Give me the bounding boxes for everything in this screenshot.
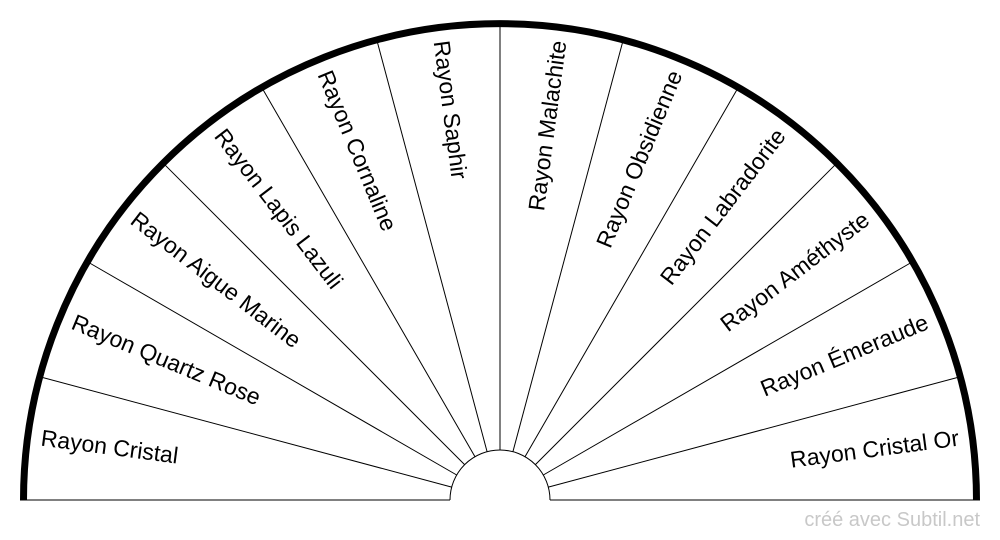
- label: Rayon Quartz Rose: Rayon Quartz Rose: [68, 309, 265, 410]
- label: Rayon Saphir: Rayon Saphir: [429, 39, 473, 181]
- label: Rayon Malachite: Rayon Malachite: [523, 39, 571, 212]
- label: Rayon Cristal Or: Rayon Cristal Or: [789, 425, 961, 473]
- label: Rayon Obsidienne: Rayon Obsidienne: [591, 67, 687, 251]
- label: Rayon Améthyste: Rayon Améthyste: [715, 206, 874, 337]
- watermark: créé avec Subtil.net: [804, 509, 980, 531]
- label: Rayon Lapis Lazuli: Rayon Lapis Lazuli: [209, 124, 348, 294]
- label: Rayon Cornaline: Rayon Cornaline: [313, 67, 402, 235]
- label: Rayon Cristal: Rayon Cristal: [40, 425, 180, 468]
- label: Rayon Labradorite: Rayon Labradorite: [655, 124, 791, 290]
- label: Rayon Aigue Marine: Rayon Aigue Marine: [126, 206, 306, 353]
- sector labels: [40, 39, 961, 473]
- label: Rayon Émeraude: Rayon Émeraude: [757, 309, 932, 401]
